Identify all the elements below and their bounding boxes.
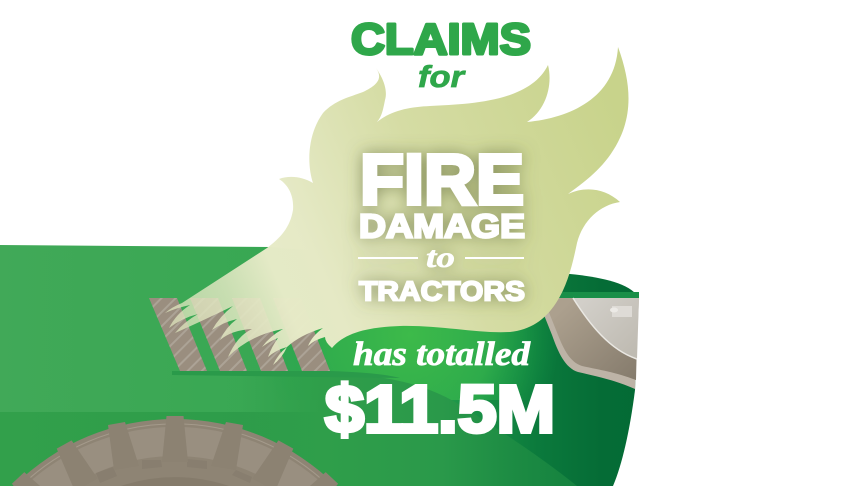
tyre <box>12 416 338 486</box>
headlight surround <box>540 298 639 389</box>
lower body band <box>240 372 577 486</box>
upper body glow <box>260 300 560 400</box>
vents <box>149 298 400 378</box>
headlight <box>540 298 639 389</box>
tractor body <box>0 245 639 486</box>
tractors: TRACTORS <box>359 276 525 306</box>
heading: claims: CLAIMS <box>351 15 531 64</box>
has totalled: has totalled <box>353 336 531 373</box>
lamp highlight <box>610 306 632 317</box>
amount: $11.5M <box>325 372 555 447</box>
hood stripe <box>552 292 639 298</box>
damage: DAMAGE <box>359 208 525 244</box>
fire: FIRE <box>360 141 524 220</box>
lower left body panel <box>0 412 340 486</box>
headlight glass <box>573 298 639 359</box>
to with rules: to <box>426 241 455 274</box>
vent shadow <box>172 371 400 378</box>
flame <box>165 47 628 365</box>
heading: for: for <box>418 59 466 94</box>
flame text block <box>358 141 525 306</box>
